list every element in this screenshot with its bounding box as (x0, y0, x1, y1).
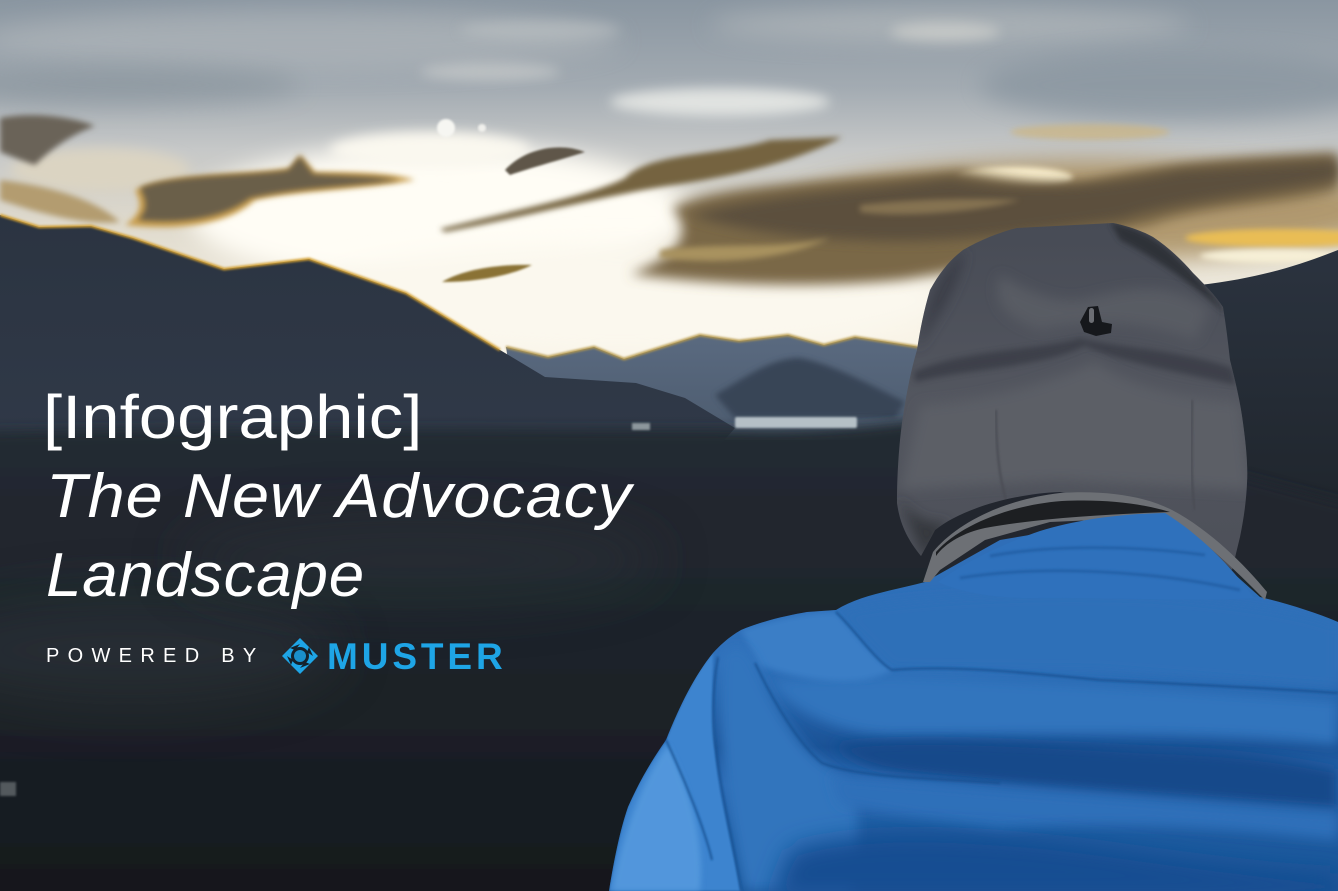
gold horizon glow on right (957, 167, 1338, 263)
middle puff highlight (770, 675, 1338, 745)
wrinkle band (914, 338, 1236, 385)
person: jacket (609, 512, 1338, 891)
right mountain (1200, 250, 1338, 520)
dark top right edge (1110, 222, 1226, 315)
sun glow (10, 119, 950, 355)
blue neck (938, 513, 1254, 600)
far mountains (506, 335, 930, 440)
forest mist and texture (0, 515, 660, 796)
inner dark mountain (715, 358, 905, 418)
text: powered by: POWERED BY (46, 645, 265, 667)
heading: infographic tag: [Infographic] (43, 383, 422, 451)
neck folds (960, 548, 1240, 590)
lake (735, 417, 857, 428)
outer grey collar edge (923, 492, 1267, 600)
heading: the new advocacy landscape (46, 462, 634, 610)
black collar band (936, 500, 1170, 556)
left mountain range (0, 215, 735, 445)
back upper puff (1318, 614, 1334, 620)
heading: the new advocacy landscape: Landscape (46, 541, 365, 610)
logo wordmark: muster: MUSTER (327, 636, 507, 677)
outer sleeve light (609, 653, 741, 891)
person: collar (923, 492, 1267, 600)
small water glint (632, 423, 650, 430)
jacket seams (666, 612, 1338, 891)
golden band (790, 160, 1338, 260)
icon: muster diamond logo (282, 638, 318, 674)
heading: the new advocacy landscape: The New Advocacy (46, 462, 632, 531)
lower shadow (770, 835, 1338, 891)
lower lighter hood area (906, 368, 1248, 486)
upper arm panel (720, 647, 858, 891)
sky (0, 0, 1338, 440)
sleeve bright lower panel (612, 745, 701, 891)
shoulder light panel (741, 612, 892, 681)
lower puff light (858, 786, 1338, 842)
hood drawcord toggle (1080, 306, 1112, 336)
dark fold shadow (835, 741, 1338, 810)
person: hood (897, 222, 1250, 570)
gold ridge far (506, 335, 918, 359)
dark clouds (0, 115, 1338, 285)
forest valley (0, 420, 1338, 891)
gold ridge left (0, 215, 500, 350)
upper cloud streaks (0, 7, 1338, 140)
